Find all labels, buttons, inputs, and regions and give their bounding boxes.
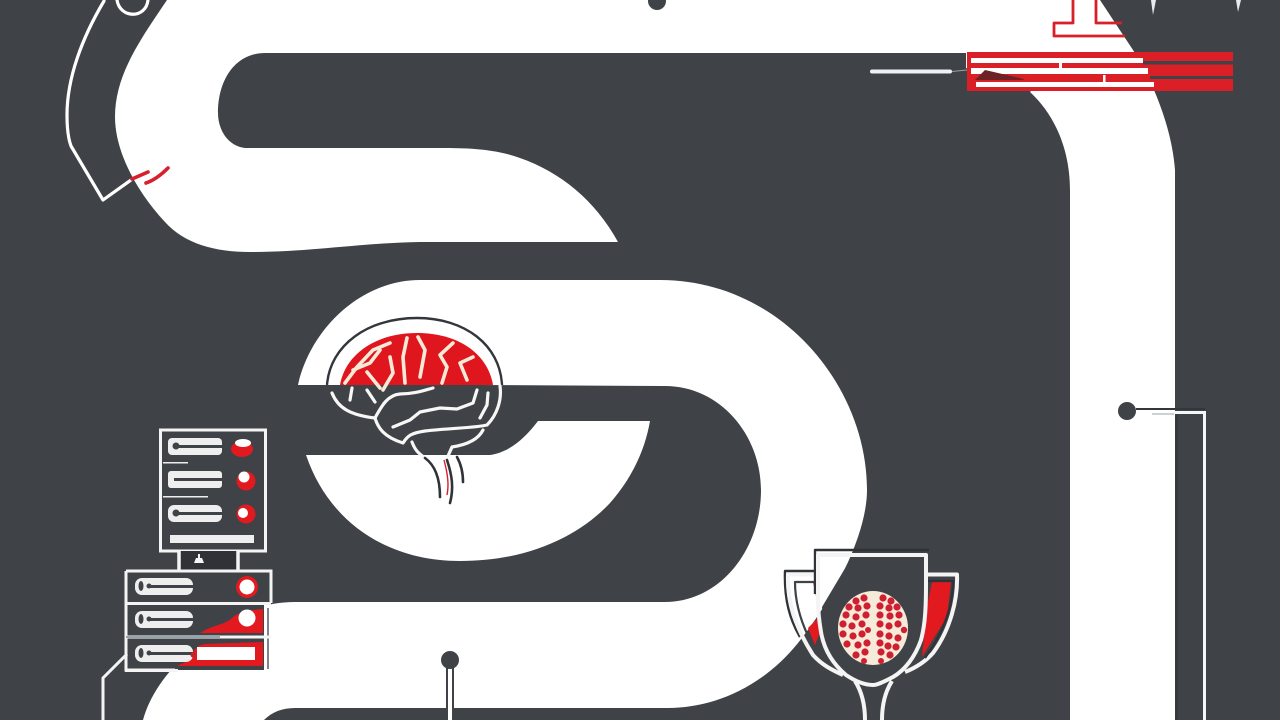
red striped banner bbox=[967, 52, 1233, 92]
trophy cup body bbox=[822, 560, 924, 682]
white panel row three bbox=[197, 647, 255, 660]
red dashes on cable bbox=[132, 168, 168, 183]
brain cream veins bbox=[345, 337, 473, 390]
trophy left handle bbox=[785, 571, 843, 675]
top-right red pedestal bbox=[1054, 0, 1125, 36]
red highlight row two bbox=[200, 609, 263, 633]
trophy cup outline bbox=[815, 550, 929, 685]
inner white crescent bbox=[306, 421, 650, 561]
server connector bbox=[178, 551, 238, 571]
pomegranate brain bbox=[838, 591, 908, 665]
icon: brain bbox=[327, 318, 502, 503]
lower server units bbox=[125, 571, 271, 670]
brain red hemisphere bbox=[340, 333, 493, 385]
right connector line bbox=[1118, 402, 1205, 720]
connector: top dot bbox=[648, 0, 666, 10]
brain dome outline bbox=[327, 318, 502, 385]
bottom connector line bbox=[441, 651, 459, 720]
top-left cable with hook bbox=[67, 0, 148, 200]
banner leader line bbox=[870, 70, 967, 74]
icon: trophy with brain bbox=[785, 550, 957, 720]
icon: server stack bbox=[103, 430, 271, 720]
top-right white spikes bbox=[1151, 0, 1241, 15]
top server cabinet bbox=[160, 430, 266, 551]
trophy right handle bbox=[905, 574, 957, 672]
brain stem bbox=[425, 457, 463, 503]
trophy red handle fills bbox=[808, 582, 951, 657]
brain stem red vein bbox=[444, 460, 448, 495]
brain lower outline bbox=[332, 386, 500, 458]
server cable bbox=[103, 654, 127, 720]
red highlight row three bbox=[177, 642, 263, 666]
lower white path band bbox=[143, 280, 867, 720]
trophy stem bbox=[855, 681, 892, 720]
